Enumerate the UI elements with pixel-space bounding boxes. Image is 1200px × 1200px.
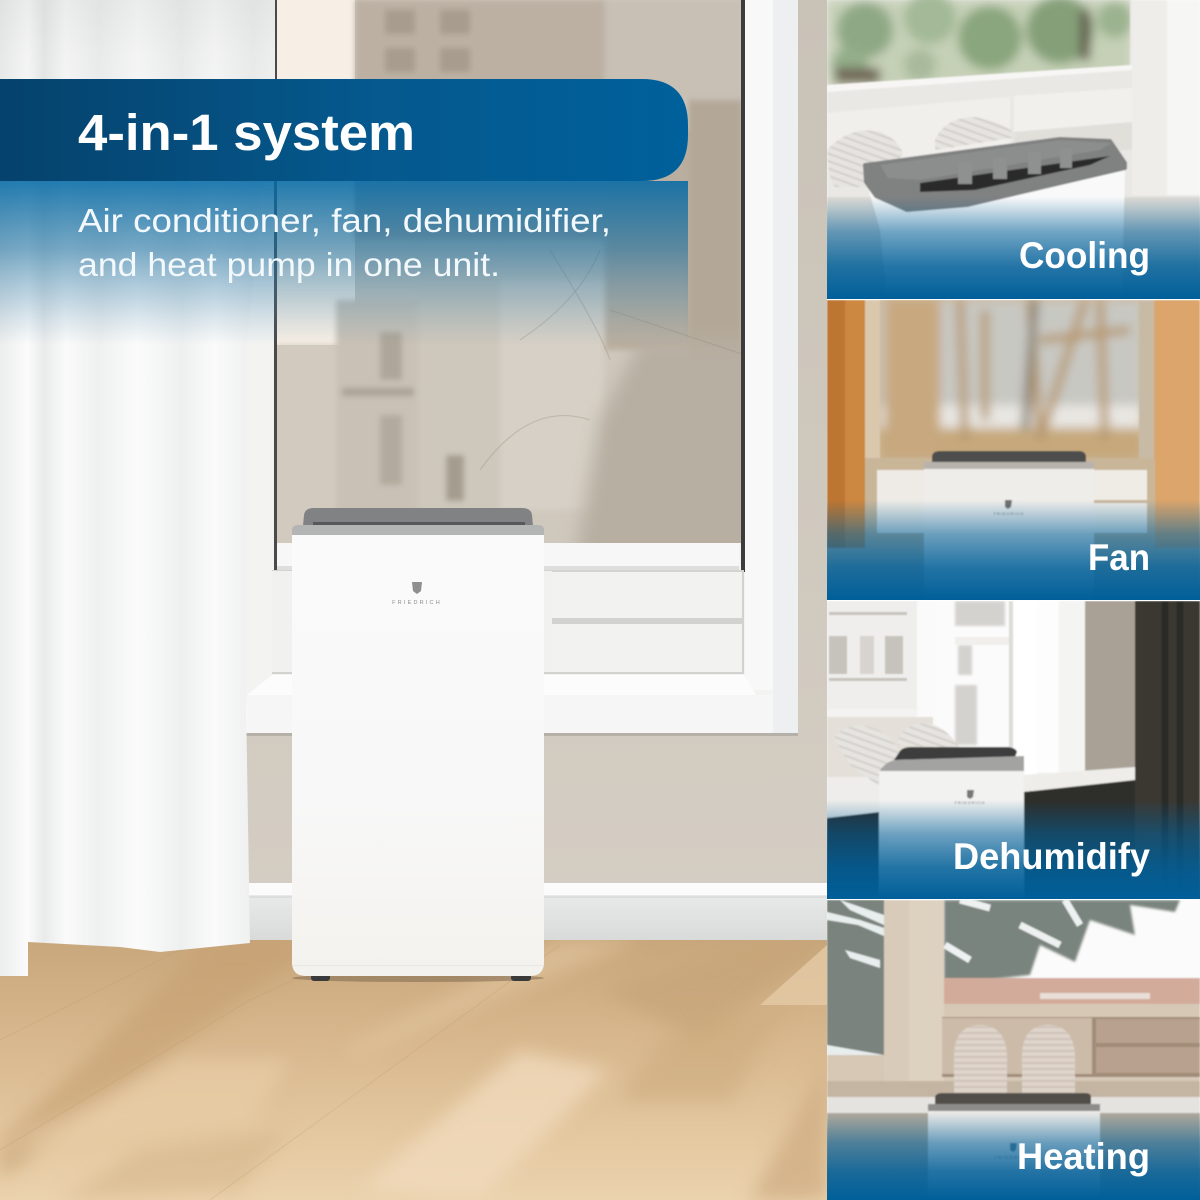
- title: 4-in-1 system: [78, 104, 415, 161]
- panel: heating: [827, 900, 1200, 1200]
- hoses: [834, 723, 960, 787]
- description text: [78, 202, 611, 283]
- panel: dehumidify: FRIEDRICH: [955, 800, 985, 805]
- label: Cooling: [1019, 235, 1150, 276]
- unit: [869, 170, 1125, 257]
- panel: cooling: [827, 0, 1200, 299]
- curtain: [0, 0, 275, 976]
- brand logo: [392, 582, 442, 606]
- floor: [0, 940, 827, 1200]
- description text: and heat pump in one unit.: [78, 246, 500, 283]
- panel: fan: [827, 300, 1200, 600]
- window glass with city view: [277, 0, 760, 560]
- main room scene: [0, 0, 827, 1200]
- portable AC unit: [292, 508, 544, 982]
- description text: Air conditioner, fan, dehumidifier,: [78, 202, 611, 239]
- label: Fan: [1088, 537, 1150, 578]
- label: Heating: [1017, 1136, 1150, 1177]
- hoses: [827, 117, 1018, 187]
- label: Dehumidify: [953, 836, 1150, 877]
- baseboard: [245, 883, 827, 940]
- panel: fan: FRIEDRICH: [994, 511, 1024, 516]
- hoses: [954, 1025, 1075, 1093]
- blue header fade: [0, 181, 688, 345]
- brand logo: FRIEDRICH: [392, 600, 442, 606]
- header banner: [0, 79, 688, 181]
- foliage: [827, 0, 1133, 88]
- panel: heating: FRIEDRICH: [994, 1155, 1030, 1160]
- window frame: [245, 0, 798, 735]
- panel: dehumidify: [827, 601, 1200, 899]
